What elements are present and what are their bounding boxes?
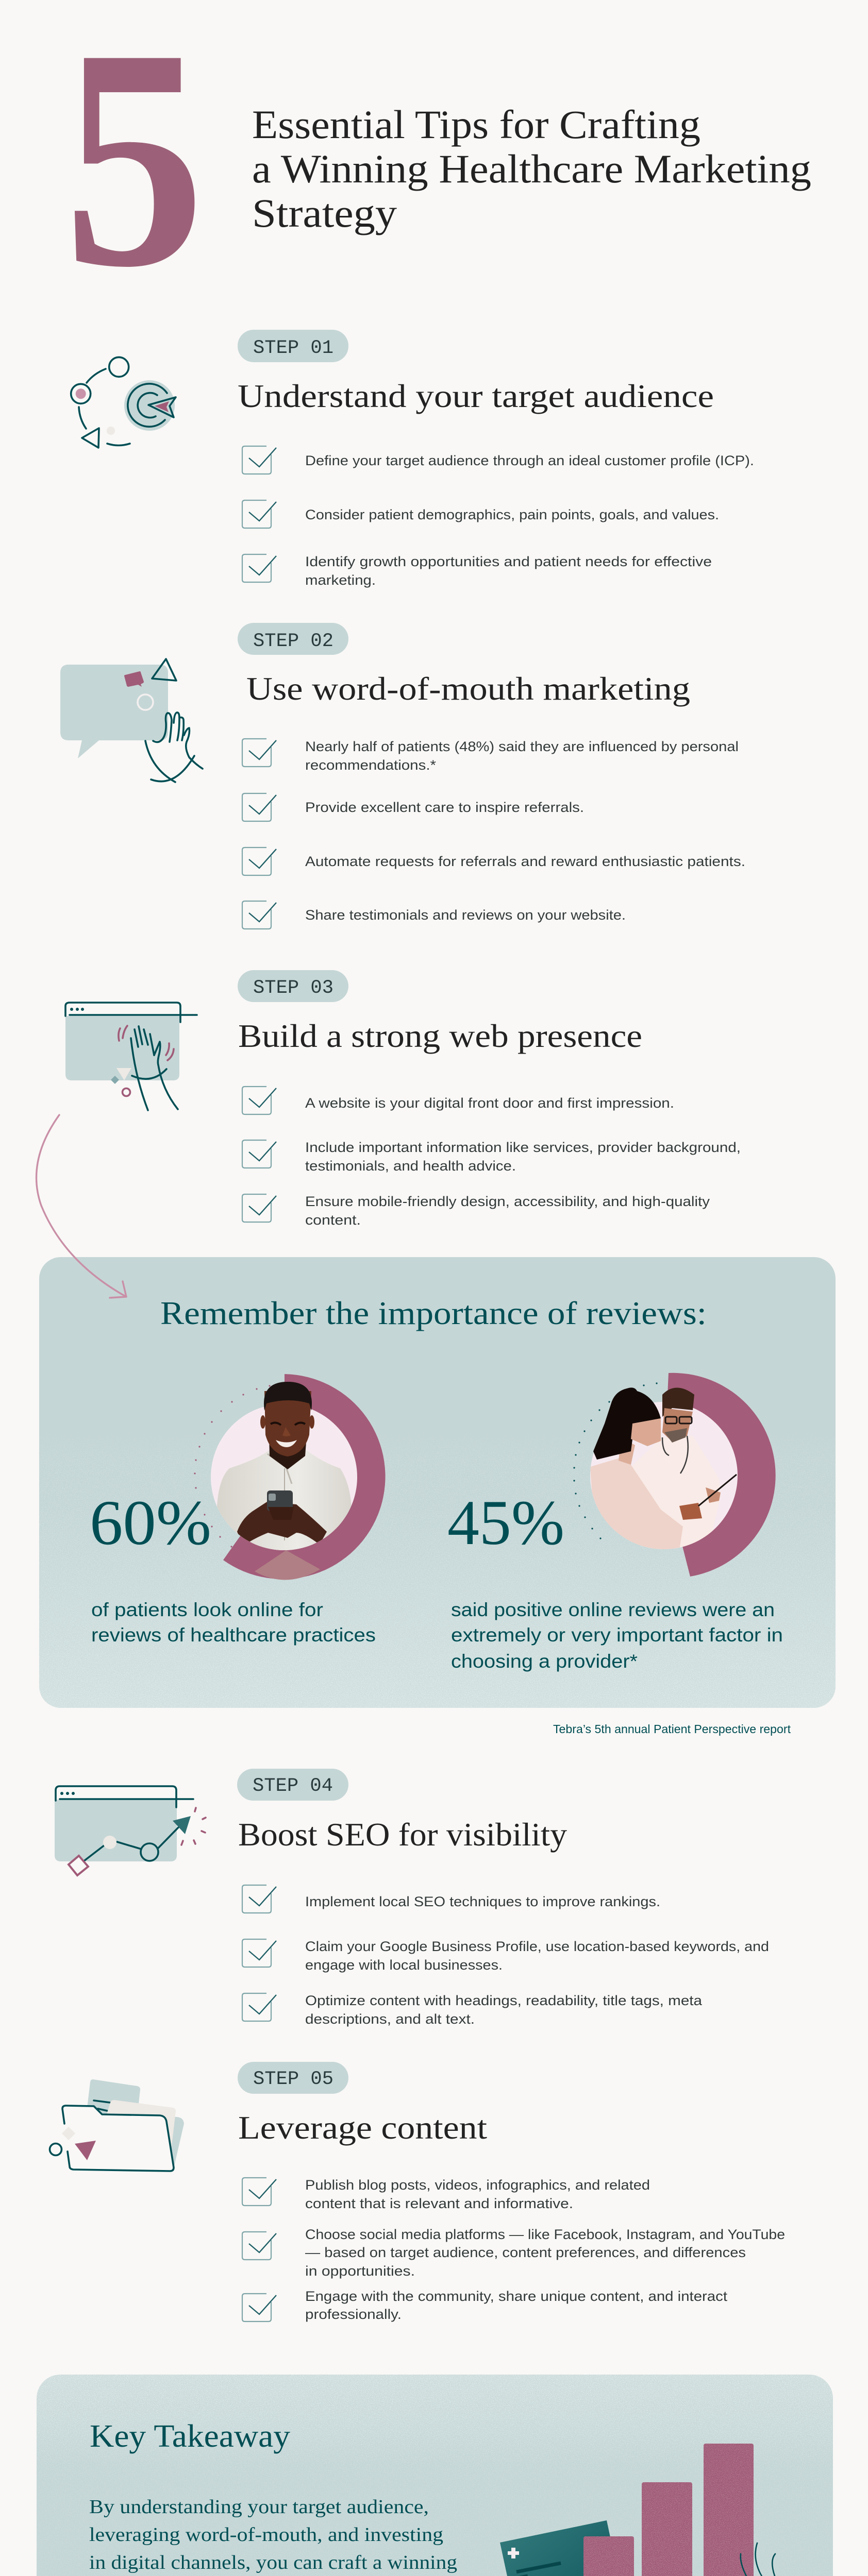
stat description: 45%: said positive online reviews were an — [451, 1599, 775, 1620]
heading: step 05: Leverage content — [238, 2109, 487, 2146]
step 05 badge: STEP 05 — [253, 2069, 333, 2090]
checklist item: in opportunities. — [305, 2263, 415, 2279]
checklist item: Implement local SEO techniques to improve rankings. — [305, 1894, 660, 1909]
stat description: 60% — [91, 1599, 376, 1646]
checklist item: Automate requests for referrals and reward enthusiastic patients. — [305, 854, 745, 869]
illustration: steaming mug — [707, 2543, 792, 2576]
panel: step 05 — [49, 2062, 785, 2322]
checklist item: Choose social media platforms — like Facebook, Instagram, and YouTube — [305, 2227, 785, 2242]
stat: 60%: 60% — [90, 1487, 211, 1558]
title: Essential Tips for Crafting — [252, 102, 700, 147]
checklist item — [242, 1939, 769, 1973]
step 04 badge: STEP 04 — [253, 1775, 333, 1797]
chart: 60% donut with photo — [90, 1373, 783, 1672]
checklist item: Claim your Google Business Profile, use location-based keywords, and — [305, 1939, 769, 1954]
checklist item: content. — [305, 1212, 361, 1228]
checklist item — [242, 2227, 785, 2279]
checklist item: recommendations.* — [305, 757, 437, 773]
step 05 badge — [238, 2062, 348, 2094]
checklist item: Nearly half of patients (48%) said they are influenced by personal — [305, 739, 739, 754]
checklist item — [242, 739, 739, 773]
step 03 badge — [238, 970, 348, 1002]
arrow: curved pointer to reviews panel — [37, 1115, 126, 1298]
heading: key takeaway: Key Takeaway — [90, 2419, 290, 2454]
checklist item — [242, 500, 719, 528]
icon: speech bubble and hand — [60, 659, 203, 782]
checklist item — [242, 848, 745, 875]
checklist item: professionally. — [305, 2307, 402, 2322]
source note: Tebra’s 5th annual Patient Perspective report — [553, 1722, 791, 1736]
title: a Winning Healthcare Marketing — [252, 146, 811, 191]
checklist item: Engage with the community, share unique content, and interact — [305, 2289, 728, 2304]
text block: key takeaway summary: leveraging word-of-mouth, and investing — [89, 2524, 443, 2546]
checklist item: content that is relevant and informative. — [305, 2196, 573, 2211]
text block: key takeaway summary: By understanding your target audience, — [89, 2496, 429, 2518]
heading: step 03: Build a strong web presence — [238, 1018, 642, 1054]
step 01 badge: STEP 01 — [253, 337, 333, 359]
checklist item — [242, 1087, 674, 1114]
title — [252, 102, 811, 235]
stat description: 45%: extremely or very important factor in — [451, 1624, 783, 1646]
checklist item: testimonials, and health advice. — [305, 1158, 516, 1174]
checklist item: Include important information like services, provider background, — [305, 1140, 741, 1155]
checklist item — [242, 1140, 741, 1174]
checklist item: Provide excellent care to inspire referrals. — [305, 800, 584, 815]
icon: target with arrow — [71, 357, 176, 448]
stat description: 45%: choosing a provider* — [451, 1651, 638, 1672]
checklist item: — based on target audience, content preferences, and differences — [305, 2245, 746, 2260]
text block: key takeaway summary — [89, 2496, 457, 2576]
stat description: 45% — [451, 1599, 783, 1672]
text block: key takeaway summary: in digital channels, you can craft a winning — [89, 2552, 457, 2573]
checklist item — [242, 2289, 728, 2322]
checklist item — [242, 793, 584, 821]
checklist item: Ensure mobile-friendly design, accessibility, and high-quality — [305, 1194, 710, 1209]
checklist item: engage with local businesses. — [305, 1957, 503, 1973]
panel: step 02 — [60, 623, 745, 929]
icon: folder with papers — [49, 2079, 184, 2171]
checklist item — [242, 2177, 650, 2211]
checklist item — [242, 446, 754, 474]
heading: step 01: Understand your target audience — [238, 378, 714, 414]
checklist item: A website is your digital front door and first impression. — [305, 1095, 674, 1111]
checklist item — [242, 554, 712, 588]
checklist item — [242, 901, 626, 929]
checklist item: marketing. — [305, 572, 376, 588]
heading: reviews: Remember the importance of reviews: — [160, 1295, 707, 1331]
chart: 45% donut with photo — [573, 1373, 776, 1577]
checklist item: Define your target audience through an ideal customer profile (ICP). — [305, 453, 754, 468]
stat description: 60%: reviews of healthcare practices — [91, 1624, 376, 1646]
photo: patient and doctor — [590, 1387, 737, 1550]
heading: step 02: Use word-of-mouth marketing — [246, 670, 690, 707]
checklist item: Optimize content with headings, readability, title tags, meta — [305, 1993, 703, 2008]
step 04 badge — [237, 1769, 348, 1801]
step 03 badge: STEP 03 — [253, 977, 333, 999]
step 02 badge — [238, 623, 348, 655]
checklist item — [242, 1194, 710, 1228]
panel: step 04 — [55, 1769, 769, 2027]
photo: man with phone — [217, 1382, 352, 1556]
heading: step 04: Boost SEO for visibility — [238, 1816, 567, 1853]
checklist item: Identify growth opportunities and patient needs for effective — [305, 554, 712, 569]
checklist item: Share testimonials and reviews on your website. — [305, 907, 626, 923]
checklist item: Consider patient demographics, pain points, goals, and values. — [305, 507, 719, 522]
panel: step 03 — [65, 970, 741, 1228]
step 02 badge: STEP 02 — [253, 631, 333, 652]
checklist item: descriptions, and alt text. — [305, 2011, 475, 2027]
checklist item — [242, 1885, 660, 1913]
step 01 badge — [238, 330, 348, 362]
stat: 45%: 45% — [447, 1487, 564, 1558]
stat description: 60%: of patients look online for — [91, 1599, 323, 1620]
panel: key takeaway — [37, 2375, 833, 2576]
panel: reviews — [37, 1115, 836, 2576]
panel: step 01 — [71, 330, 754, 588]
illustration: document — [500, 2520, 610, 2576]
icon: browser window with growth line — [55, 1786, 206, 1875]
checklist item — [242, 1993, 703, 2027]
title: Strategy — [252, 191, 397, 235]
checklist item: Publish blog posts, videos, infographics, and related — [305, 2177, 650, 2193]
icon: browser window with waving hand — [65, 1003, 197, 1110]
bar chart: rising bars — [577, 2442, 763, 2576]
